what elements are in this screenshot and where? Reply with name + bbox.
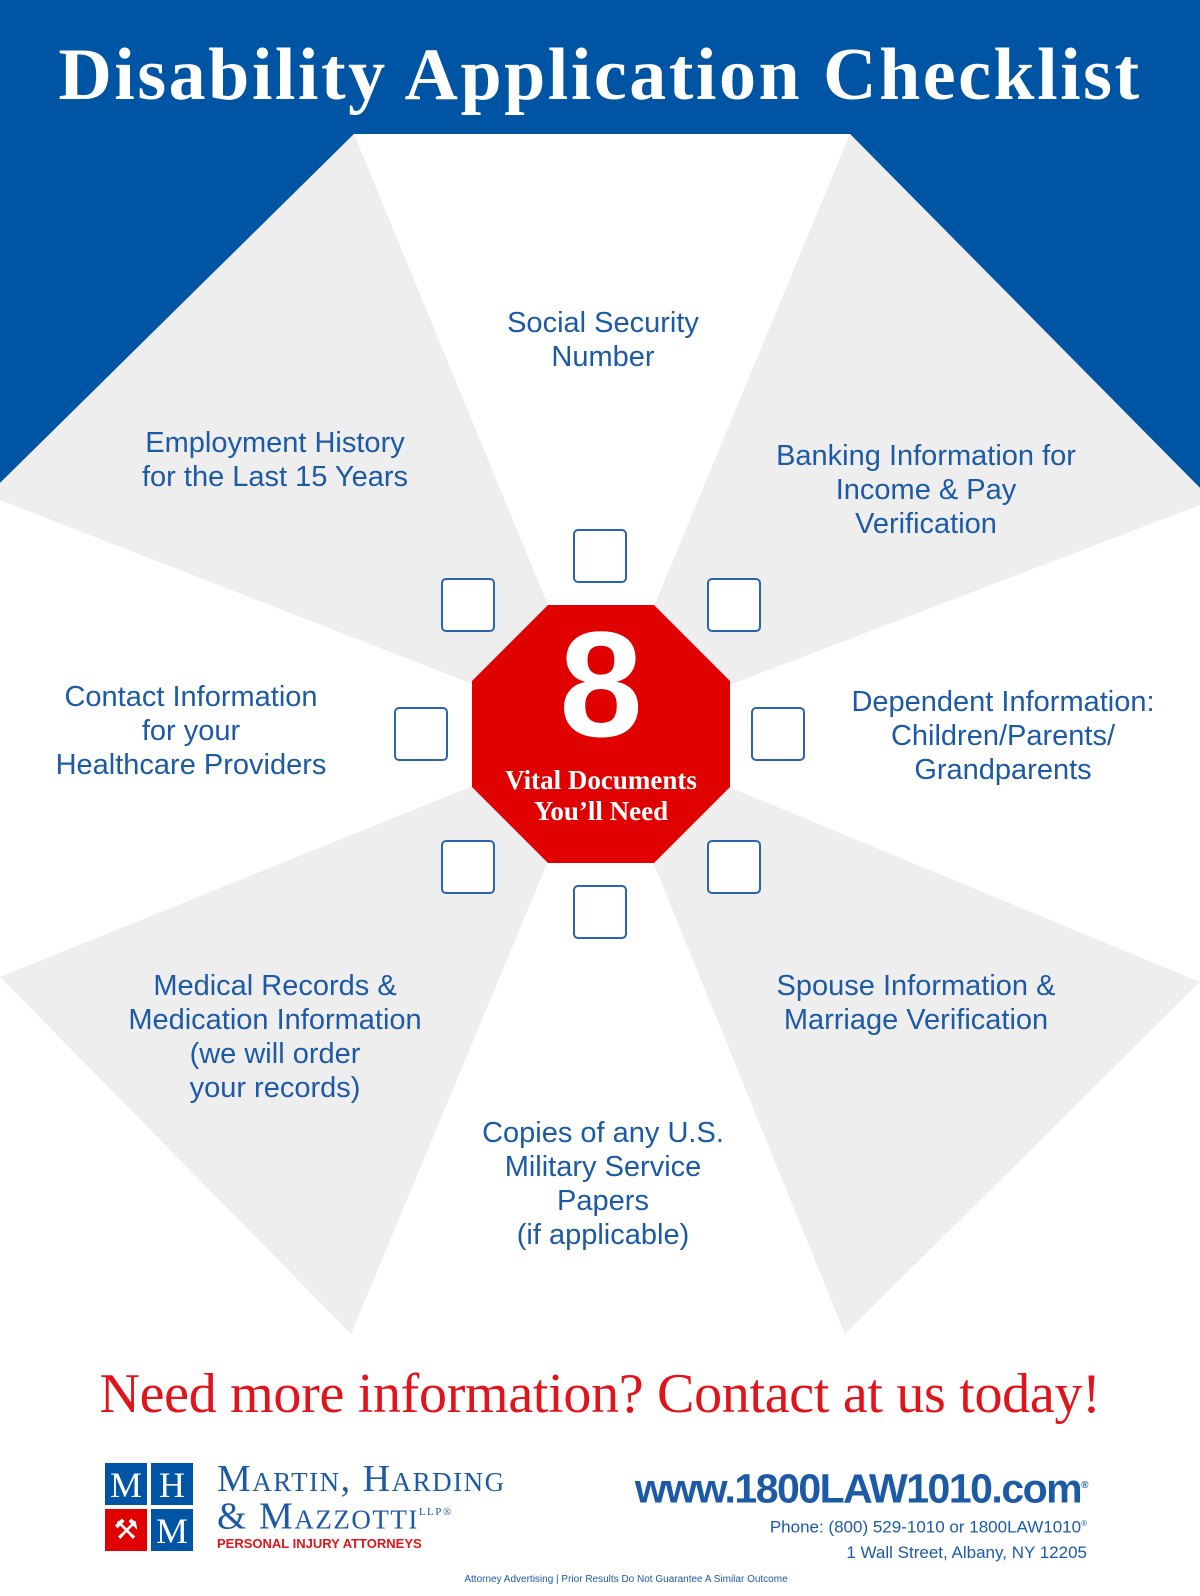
item: dependent	[851, 686, 1155, 786]
item: social security: Number	[551, 341, 655, 373]
item: contact	[56, 681, 326, 781]
item: banking: Verification	[855, 508, 997, 540]
item: dependent: Grandparents	[914, 754, 1092, 786]
logo: PERSONAL INJURY ATTORNEYS	[217, 1536, 422, 1551]
checkboxes	[394, 529, 805, 939]
item: medical	[128, 970, 422, 1104]
badge text: You’ll Need	[534, 796, 668, 826]
item: military: Copies of any U.S.	[482, 1117, 724, 1149]
item: spouse: Spouse Information &	[777, 970, 1055, 1002]
badge text	[505, 765, 697, 826]
contact info	[634, 1466, 1088, 1562]
item: employment: for the Last 15 Years	[142, 461, 408, 493]
item: contact: for your	[142, 715, 240, 747]
title: Disability Application Checklist	[58, 34, 1142, 116]
item: medical: Medication Information	[128, 1004, 422, 1036]
item: contact: Contact Information	[64, 681, 318, 713]
item: banking: Banking Information for	[776, 440, 1076, 472]
item: employment: Employment History	[145, 427, 405, 459]
item: employment	[142, 427, 408, 493]
item: contact: Healthcare Providers	[56, 749, 326, 781]
item: banking	[776, 440, 1076, 540]
item: medical: Medical Records &	[153, 970, 397, 1002]
item: banking: Income & Pay	[836, 474, 1016, 506]
item: dependent: Dependent Information:	[851, 686, 1155, 718]
disclaimer: Attorney Advertising | Prior Results Do Not Guarantee A Similar Outcome	[464, 1574, 788, 1585]
item: dependent: Children/Parents/	[891, 720, 1115, 752]
contact info: Phone: (800) 529-1010 or 1800LAW1010®	[770, 1517, 1087, 1536]
item: military: (if applicable)	[517, 1219, 689, 1251]
item: spouse: Marriage Verification	[784, 1004, 1048, 1036]
badge text: Vital Documents	[505, 765, 697, 795]
item: social security	[507, 307, 699, 373]
octagon badge	[472, 600, 730, 863]
logo: ⚒	[113, 1514, 139, 1545]
logo: H	[159, 1465, 185, 1505]
contact info: 1 Wall Street, Albany, NY 12205	[846, 1543, 1087, 1562]
item: spouse	[777, 970, 1055, 1036]
number 8: 8	[559, 600, 643, 768]
logo: M	[110, 1465, 142, 1505]
logo	[105, 1458, 506, 1551]
item: military	[482, 1117, 724, 1251]
contact info: www.1800LAW1010.com®	[635, 1466, 1087, 1512]
logo: & MazzottiLLP®	[217, 1496, 453, 1538]
item: social security: Social Security	[507, 307, 699, 339]
logo: M	[156, 1511, 188, 1551]
item: medical: your records)	[190, 1072, 360, 1104]
call to action: Need more information? Contact at us today!	[99, 1363, 1100, 1425]
item: military: Papers	[557, 1185, 649, 1217]
item: medical: (we will order	[190, 1038, 360, 1070]
item: military: Military Service	[505, 1151, 701, 1183]
logo: Martin, Harding	[217, 1458, 506, 1500]
